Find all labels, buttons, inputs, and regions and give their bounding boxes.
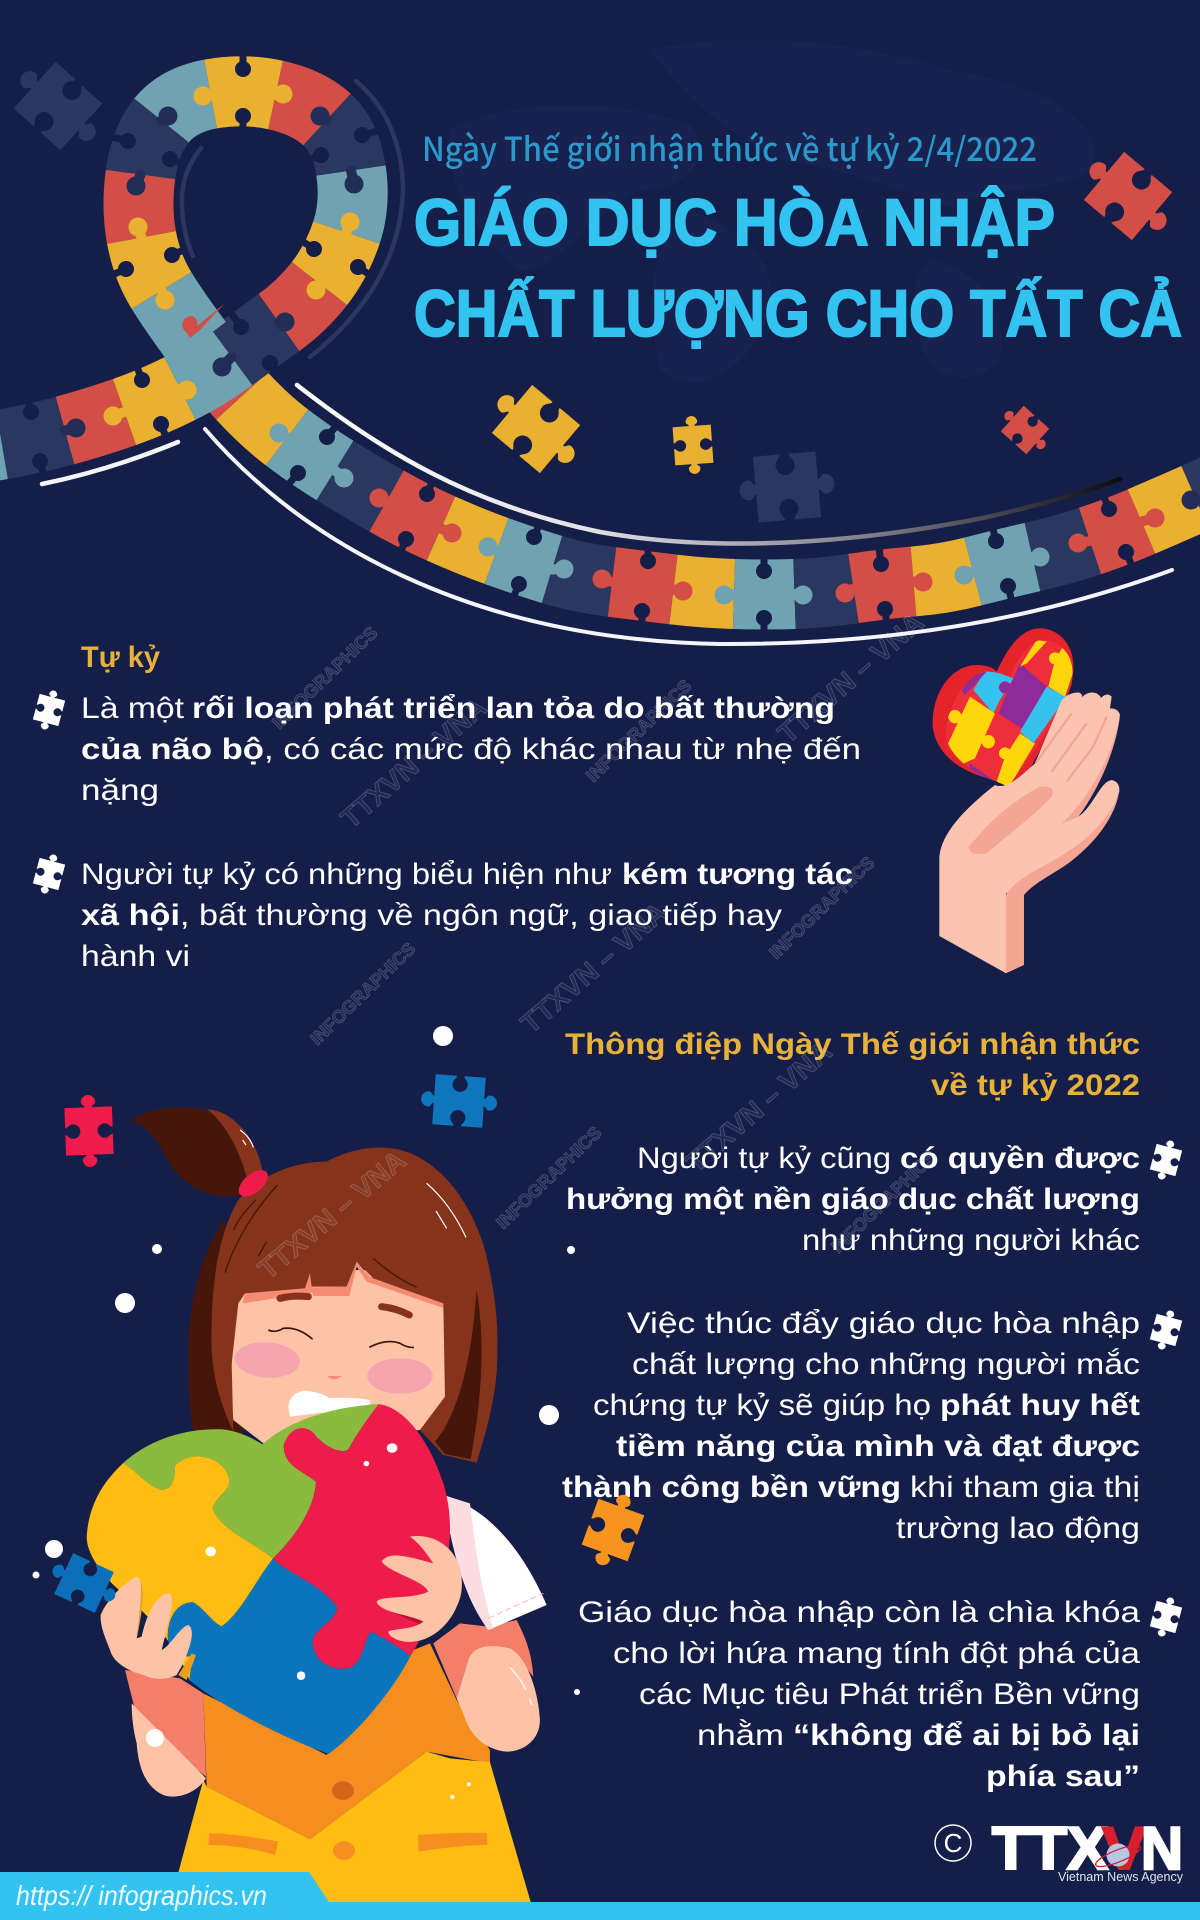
watermarks: INFOGRAPHICS xyxy=(827,1147,940,1257)
text block: definition: rối loạn phát triển lan tỏa do bất thường xyxy=(192,692,835,725)
text block: definition: Là một xyxy=(81,692,185,725)
text block: SDG promise xyxy=(578,1596,1140,1793)
girl: head xyxy=(188,1130,497,1463)
heart: green piece xyxy=(123,1404,379,1558)
text block: symptoms: kém tương tác xyxy=(622,858,853,891)
title: GIÁO DỤC HÒA NHẬP xyxy=(414,185,1055,259)
icon: blue puzzle near heart xyxy=(44,1548,124,1618)
subtitle: Ngày Thế giới nhận thức về tự kỷ 2/4/2022 xyxy=(422,123,1037,171)
text block: symptoms: xã hội xyxy=(81,899,180,932)
girl: ponytail xyxy=(130,1108,262,1196)
ribbon accent lines xyxy=(42,81,1172,644)
text block: symptoms: , bất thường về ngôn ngữ, giao tiếp hay xyxy=(180,899,782,932)
icon: bullet puzzle xyxy=(1148,1137,1184,1183)
watermarks: TTXVN – VNA xyxy=(772,606,930,749)
decorative white dots xyxy=(32,1026,580,1747)
logo: TTXVN: N xyxy=(1141,1815,1183,1882)
text block: definition: của não bộ xyxy=(81,733,264,766)
illustration: hand holding puzzle heart xyxy=(930,627,1120,973)
text block: symptoms xyxy=(81,858,853,973)
text block: SDG promise: cho lời hứa mang tính đột phá của xyxy=(613,1637,1140,1670)
icon: bullet puzzle xyxy=(1148,1594,1184,1640)
icon: bullet puzzle xyxy=(31,687,67,733)
text block: right to education: hưởng một nền giáo dục chất lượng xyxy=(566,1183,1140,1216)
text block: inclusive education: khi tham gia thị xyxy=(910,1471,1140,1504)
watermarks: TTXVN – VNA xyxy=(252,1144,412,1285)
illustration: girl hugging puzzle heart xyxy=(87,1108,547,1913)
faint world map xyxy=(448,40,1094,382)
logo: TTXVN: Vietnam News Agency xyxy=(1058,1869,1183,1884)
girl: hands xyxy=(101,1536,462,1680)
text block: inclusive education: Việc thúc đẩy giáo dục hòa nhập xyxy=(627,1307,1140,1340)
floating puzzle pieces: lower xyxy=(64,1073,649,1573)
watermarks xyxy=(252,606,940,1285)
text block: definition: , có các mức độ khác nhau từ nhẹ đến xyxy=(264,733,861,766)
text block: right to education: có quyền được xyxy=(900,1142,1140,1175)
heading: message: Thông điệp Ngày Thế giới nhận thức xyxy=(565,1028,1140,1061)
logo: TTXVN: C xyxy=(944,1828,962,1858)
title xyxy=(414,185,1182,350)
text block: SDG promise: nhằm xyxy=(697,1719,784,1752)
section: Tự kỷ xyxy=(31,641,861,973)
ribbon: puzzle awareness ribbon xyxy=(0,51,1200,634)
text block: inclusive education: trường lao động xyxy=(896,1512,1140,1545)
heart: puzzle pieces xyxy=(87,1404,450,1754)
girl: dress and arms xyxy=(125,1495,547,1913)
floating puzzle pieces: header xyxy=(2,51,1185,524)
text block: SDG promise: “không để ai bị bỏ lại xyxy=(793,1719,1140,1752)
text block: inclusive education: chất lượng cho những người mắc xyxy=(632,1348,1140,1381)
text block: SDG promise: các Mục tiêu Phát triển Bền vững xyxy=(639,1678,1140,1711)
text block: inclusive education: chứng tự kỷ sẽ giúp họ xyxy=(593,1389,931,1422)
text block: definition xyxy=(81,692,861,807)
watermarks: INFOGRAPHICS xyxy=(268,623,381,733)
heading: message: về tự kỷ 2022 xyxy=(931,1069,1140,1102)
watermarks: INFOGRAPHICS xyxy=(492,1123,605,1233)
text block: inclusive education: phát huy hết xyxy=(940,1389,1140,1422)
watermarks: TTXVN – VNA xyxy=(515,896,673,1039)
icon: bullet puzzle xyxy=(31,851,67,897)
heading: Tự kỷ: Tự kỷ xyxy=(81,641,160,674)
text block: inclusive education: tiềm năng của mình và đạt được xyxy=(616,1430,1140,1463)
section: message of the day xyxy=(562,1028,1184,1793)
watermarks: INFOGRAPHICS xyxy=(765,853,878,963)
logo: TTXVN: V xyxy=(1102,1815,1146,1882)
heart: yellow piece xyxy=(87,1456,273,1680)
watermarks: INFOGRAPHICS xyxy=(306,939,419,1049)
text block: right to education: Người tự kỷ cũng xyxy=(637,1142,891,1175)
text block: SDG promise: phía sau” xyxy=(986,1760,1140,1793)
watermarks: INFOGRAPHICS xyxy=(582,676,695,786)
watermarks: TTXVN – VNA xyxy=(680,1035,838,1178)
text block: inclusive education: thành công bền vững xyxy=(562,1471,901,1504)
text block: symptoms: Người tự kỷ có những biểu hiện như xyxy=(81,858,612,891)
footer url: https:// infographics.vn xyxy=(16,1880,267,1911)
text block: symptoms: hành vi xyxy=(81,940,190,973)
text block: definition: nặng xyxy=(81,774,159,807)
text block: right to education: như những người khác xyxy=(802,1224,1140,1257)
footer bar xyxy=(0,1872,1200,1920)
logo: TTXVN xyxy=(935,1815,1183,1884)
heart: red piece xyxy=(273,1404,450,1669)
icon: bullet puzzle xyxy=(1148,1307,1184,1353)
watermarks: TTXVN – VNA xyxy=(335,691,493,834)
heading: message xyxy=(565,1028,1140,1102)
logo: TTXVN: TTX xyxy=(992,1815,1108,1882)
heart: blue piece xyxy=(168,1558,411,1754)
text block: SDG promise: Giáo dục hòa nhập còn là chìa khóa xyxy=(578,1596,1140,1629)
text block: inclusive education xyxy=(562,1307,1140,1545)
text block: right to education xyxy=(566,1142,1140,1257)
